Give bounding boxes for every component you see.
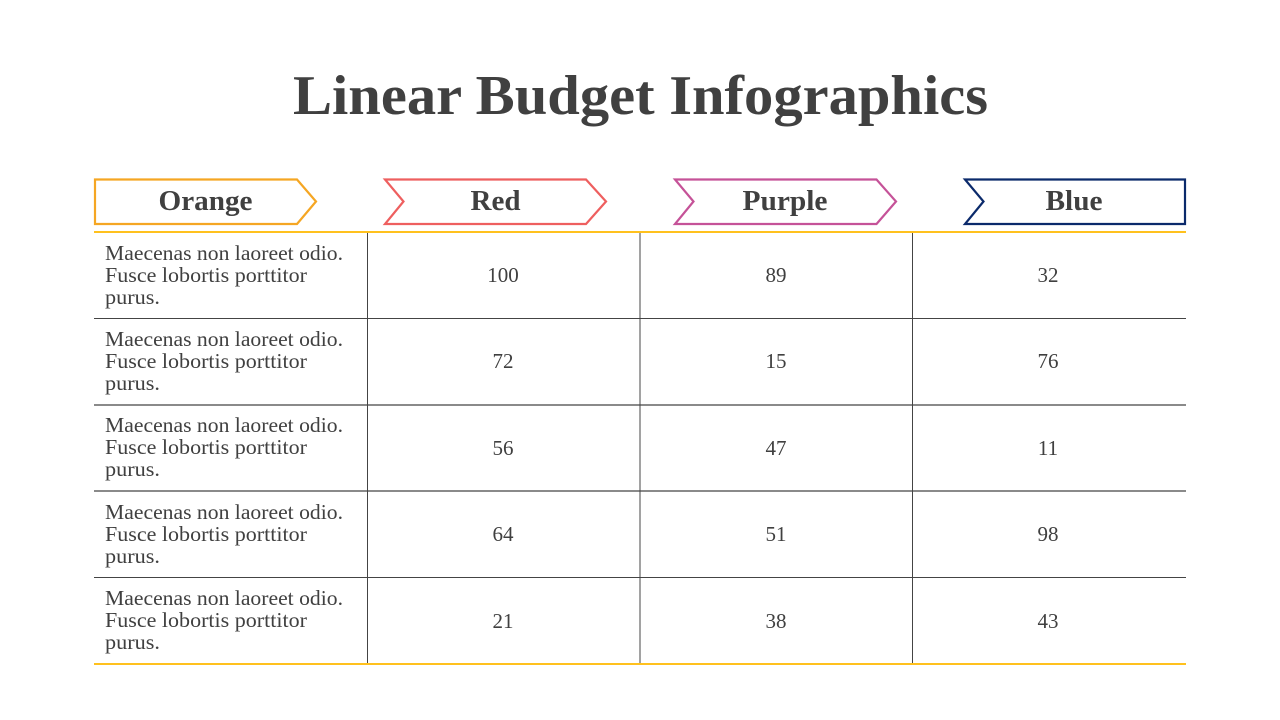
row 5: Maecenas non laoreet odio. [105,586,343,610]
row 1: Maecenas non laoreet odio. [105,241,343,265]
row 2: Maecenas non laoreet odio. [105,327,343,351]
row 5: 21 [492,609,514,633]
row 4: Fusce lobortis porttitor [105,522,307,546]
row 3: 56 [492,436,514,460]
row 1: 100 [487,263,519,287]
header: orange arrow [95,180,316,224]
row 2: 72 [492,349,514,373]
title: Linear Budget Infographics [293,65,988,127]
row 1: purus. [105,285,160,309]
row 2 [105,327,1058,395]
row 2: purus. [105,371,160,395]
row 5: 43 [1038,609,1058,633]
row 2: 76 [1038,349,1058,373]
row 4: Maecenas non laoreet odio. [105,500,343,524]
row 1: 89 [766,263,786,287]
row 2: 15 [766,349,786,373]
row 4 [105,500,1058,568]
row 4: 51 [766,522,786,546]
row 3: purus. [105,457,160,481]
header: orange arrow: Orange [158,185,253,217]
header: blue arrow [965,180,1185,224]
row 3 [105,413,1058,481]
row 1: Fusce lobortis porttitor [105,263,307,287]
row 5: Fusce lobortis porttitor [105,608,307,632]
row 4: 64 [492,522,514,546]
row 4: 98 [1038,522,1058,546]
row 3: 47 [766,436,786,460]
header: purple arrow [675,180,896,224]
row 3: Maecenas non laoreet odio. [105,413,343,437]
table grid [94,231,1186,664]
row 3: Fusce lobortis porttitor [105,435,307,459]
row 3: 11 [1038,436,1058,460]
header: blue arrow: Blue [1046,185,1103,217]
row 5: purus. [105,630,160,654]
header: red arrow: Red [470,185,520,217]
header: purple arrow: Purple [742,185,828,217]
row 5: 38 [766,609,786,633]
row 1: 32 [1038,263,1058,287]
row 2: Fusce lobortis porttitor [105,349,307,373]
row 1 [105,241,1058,309]
row 4: purus. [105,544,160,568]
header: red arrow [385,180,606,224]
row 5 [105,586,1058,654]
